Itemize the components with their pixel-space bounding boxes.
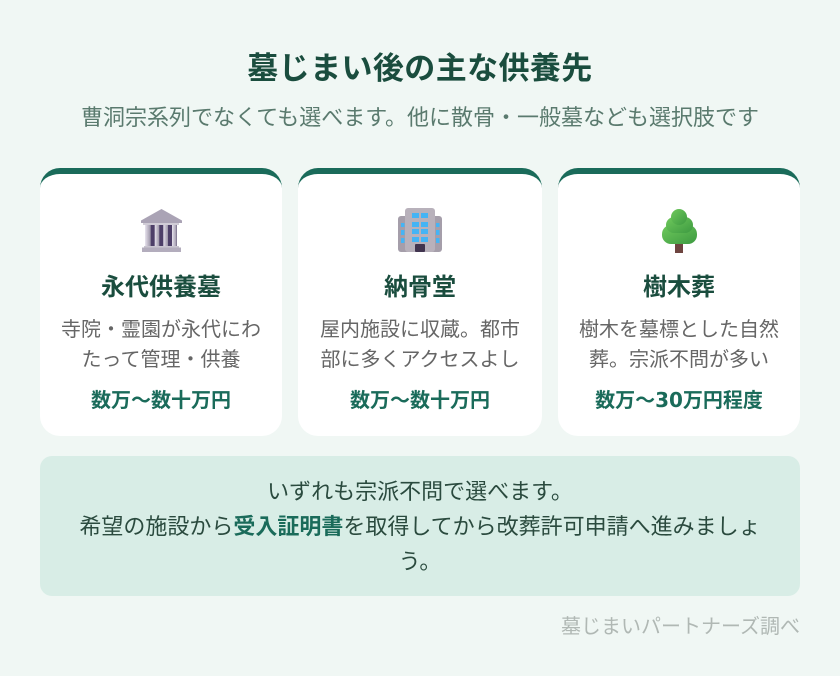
description bbox=[320, 317, 520, 371]
callout: いずれも宗派不問で選べます。 bbox=[267, 480, 573, 505]
description: 屋内施設に収蔵。都市 bbox=[320, 317, 520, 341]
heading: 樹木葬 bbox=[643, 273, 715, 301]
heading: 納骨堂 bbox=[384, 273, 456, 301]
title: 墓じまい後の主な供養先 bbox=[247, 51, 593, 87]
description: 樹木を墓標とした自然 bbox=[579, 317, 779, 341]
panel: 納骨堂 bbox=[298, 168, 542, 436]
subtitle: 曹洞宗系列でなくても選べます。他に散骨・一般墓なども選択肢です bbox=[81, 106, 759, 131]
description: 寺院・霊園が永代にわ bbox=[61, 317, 261, 341]
description bbox=[61, 317, 261, 371]
description bbox=[579, 317, 779, 371]
icon: office building bbox=[398, 208, 442, 252]
callout: う。 bbox=[399, 550, 441, 575]
price: 数万～30万円程度 bbox=[595, 388, 763, 412]
icon: classical building bbox=[141, 209, 182, 252]
price: 数万～数十万円 bbox=[91, 388, 231, 412]
description: 葬。宗派不問が多い bbox=[589, 347, 769, 371]
panel: 永代供養墓 bbox=[40, 168, 282, 436]
callout bbox=[40, 456, 800, 596]
description: 部に多くアクセスよし bbox=[320, 347, 520, 371]
icon: tree bbox=[662, 209, 697, 253]
price: 数万～数十万円 bbox=[350, 388, 490, 412]
description: たって管理・供養 bbox=[82, 347, 240, 371]
heading: 永代供養墓 bbox=[101, 273, 221, 301]
source: 墓じまいパートナーズ調べ bbox=[561, 614, 800, 638]
callout: 希望の施設から受入証明書を取得してから改葬許可申請へ進みましょ bbox=[79, 515, 761, 540]
panel: 樹木葬 bbox=[558, 168, 800, 436]
